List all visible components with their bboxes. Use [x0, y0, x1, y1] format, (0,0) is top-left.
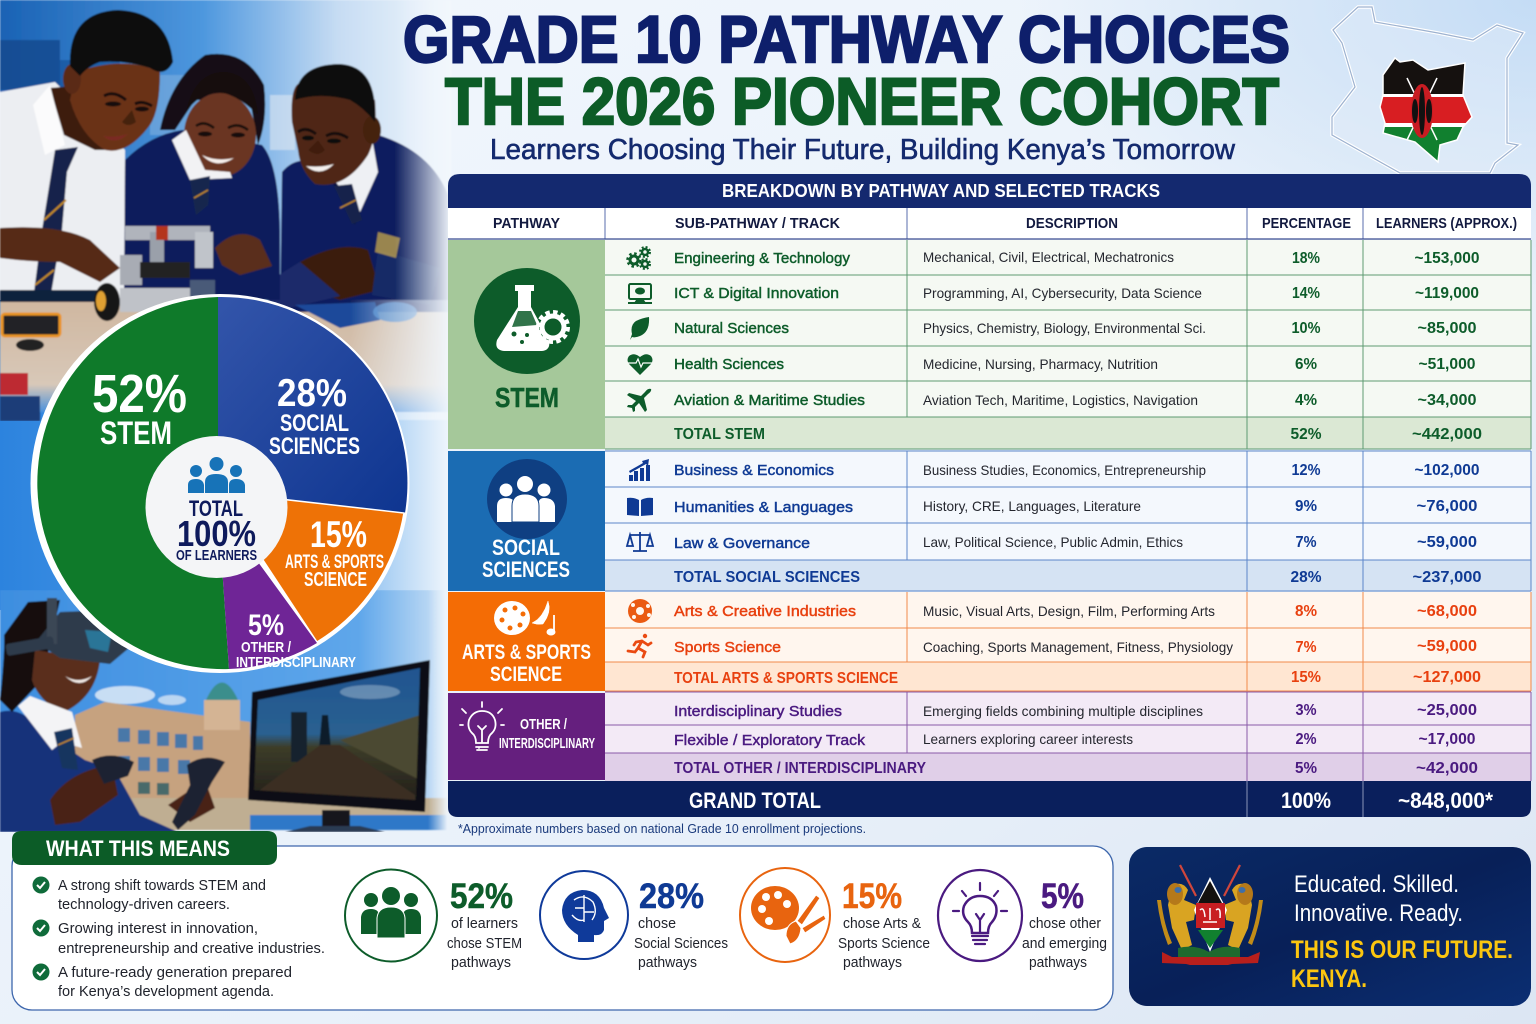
row: total Other / Interdisciplinary: TOTAL OTHER / INTERDISCIPLINARY	[674, 760, 927, 777]
heading line 2: THE 2026 PIONEER COHORT	[445, 64, 1279, 138]
bullet: future-ready generation	[32, 964, 292, 1000]
row: Health Sciences: ~51,000	[1418, 356, 1476, 373]
row: grand total: ~848,000*	[1398, 788, 1493, 813]
row: Humanities and Languages: ~76,000	[1416, 498, 1478, 515]
bullet: shift towards STEM	[32, 876, 266, 913]
row: Business and Economics: 12%	[1292, 462, 1321, 479]
icon: scales of justice	[627, 532, 653, 551]
row: Health Sciences: Medicine, Nursing, Pharmacy, Nutrition	[923, 356, 1158, 372]
pathway cell: Arts and Sports Science: ARTS & SPORTS	[462, 641, 591, 664]
row: Interdisciplinary Studies: 3%	[1296, 702, 1317, 719]
row: Interdisciplinary Studies: Interdisciplinary Studies	[674, 703, 842, 720]
stat: 28% Social Sciences	[540, 871, 728, 971]
stat: 28% Social Sciences: pathways	[638, 954, 697, 971]
row: Health Sciences: 6%	[1295, 356, 1317, 373]
row: total Arts and Sports Science: TOTAL ARTS & SPORTS SCIENCE	[674, 670, 898, 687]
student right	[255, 64, 450, 312]
row: Natural Sciences: Natural Sciences	[674, 320, 789, 337]
pathway cell: Other / Interdisciplinary: INTERDISCIPLINARY	[499, 735, 595, 752]
row: Sports Science: Sports Science	[674, 639, 781, 656]
row: Interdisciplinary Studies: ~25,000	[1417, 702, 1477, 719]
row: Business and Economics: Business & Economics	[674, 462, 834, 479]
row: Aviation and Maritime Studies: 4%	[1295, 392, 1317, 409]
title block	[403, 2, 1290, 166]
student centre	[116, 54, 280, 300]
row: ICT and Digital Innovation: ~119,000	[1415, 285, 1479, 302]
stat: 52% STEM: pathways	[451, 954, 511, 971]
row: Law and Governance: Law & Governance	[674, 535, 810, 552]
stat: 52% STEM: chose STEM	[447, 935, 522, 952]
stat: 52% STEM	[345, 870, 522, 971]
row: Flexible / Exploratory Track: Flexible / Exploratory Track	[674, 732, 866, 749]
bullet: shift towards STEM: A strong shift towards STEM and	[58, 877, 266, 894]
icon: group of people	[188, 457, 245, 493]
row: total Arts and Sports Science: ~127,000	[1413, 669, 1481, 686]
row: Business and Economics	[629, 459, 1480, 481]
row: total Arts and Sports Science: 15%	[1291, 669, 1321, 686]
stat: 52% STEM: of learners	[451, 915, 518, 932]
row: Humanities and Languages: 9%	[1295, 498, 1317, 515]
row: Health Sciences	[628, 354, 1476, 375]
robot kit	[94, 226, 215, 321]
row: Business and Economics: ~102,000	[1414, 462, 1480, 479]
desk items	[0, 302, 417, 421]
student left	[0, 10, 173, 302]
centre badge: total 100% of learners	[146, 436, 288, 578]
column headers: SUB-PATHWAY / TRACK	[675, 215, 840, 232]
row: Flexible / Exploratory Track: ~17,000	[1418, 731, 1476, 748]
photo: VR learner, campus and monitor	[0, 590, 448, 832]
lion right	[1224, 884, 1252, 950]
row: Aviation and Maritime Studies: Aviation & Maritime Studies	[674, 392, 865, 409]
pathway cell: STEM	[448, 240, 605, 449]
row: Sports Science: Coaching, Sports Management, Fitness, Physiology	[923, 639, 1233, 655]
row: Law and Governance: Law, Political Science, Public Admin, Ethics	[923, 534, 1183, 550]
heading tab: WHAT THIS MEANS	[46, 836, 230, 861]
pathway cell: Other / Interdisciplinary: OTHER /	[520, 717, 567, 733]
section: STEM	[448, 240, 1531, 449]
stat: 15% Arts and Sports Science	[740, 868, 930, 971]
pathway cell: Arts and Sports Science: SCIENCE	[490, 663, 562, 686]
row: Aviation and Maritime Studies	[627, 389, 1477, 412]
row: Sports Science: ~59,000	[1417, 638, 1477, 655]
row: Engineering and Technology: Engineering & Technology	[674, 250, 850, 267]
row: Arts and Creative Industries	[628, 599, 1477, 623]
campus building	[75, 682, 448, 830]
row: Sports Science	[628, 634, 1477, 657]
row: Law and Governance	[627, 532, 1477, 552]
section: Arts and Sports Science	[448, 592, 1531, 691]
row: total Social Sciences: 28%	[1290, 569, 1322, 586]
bullet: innovation and entrepreneurship: entrepreneurship and creative industries.	[58, 940, 325, 957]
icon: rising bar chart	[629, 459, 650, 481]
photo: three students building a robot	[0, 0, 452, 421]
icon: head with brain	[540, 871, 628, 959]
section: Other / Interdisciplinary	[448, 692, 1531, 781]
label: 52% STEM: STEM	[100, 415, 172, 451]
centre badge: total 100% of learners: 100%	[177, 513, 256, 554]
icon: open book	[627, 498, 653, 516]
table: breakdown by pathway and selected tracks	[448, 174, 1531, 817]
icon: music notes	[532, 601, 555, 635]
row: Humanities and Languages: Humanities & Languages	[674, 499, 853, 516]
row: Arts and Creative Industries: ~68,000	[1417, 603, 1477, 620]
row: Law and Governance: ~59,000	[1417, 534, 1477, 551]
label: 5% Other: 5%	[248, 609, 284, 642]
row: Humanities and Languages	[627, 498, 1478, 516]
label: 28% Social Sciences	[269, 372, 360, 460]
row: Engineering and Technology: Mechanical, Civil, Electrical, Mechatronics	[923, 249, 1174, 265]
row: Flexible / Exploratory Track: Learners exploring career interests	[923, 731, 1133, 747]
stat: 5% other and emerging: chose other	[1029, 915, 1101, 932]
icon: airplane	[627, 389, 651, 412]
row: Arts and Creative Industries: 8%	[1295, 603, 1317, 620]
column headers	[448, 208, 1531, 239]
row: Engineering and Technology	[628, 247, 1480, 269]
column headers: DESCRIPTION	[1026, 215, 1118, 232]
heading line 1: GRADE 10 PATHWAY CHOICES	[403, 2, 1290, 76]
row: ICT and Digital Innovation: 14%	[1292, 285, 1320, 302]
stat: 15% Arts and Sports Science: chose Arts &	[843, 915, 921, 932]
centre badge: total 100% of learners: TOTAL	[189, 496, 243, 521]
stat: 28% Social Sciences: 28%	[639, 877, 704, 916]
icon: Kenya coat of arms	[1157, 865, 1263, 965]
stat: 28% Social Sciences: chose	[638, 915, 676, 932]
pathway cell: Social Sciences: SOCIAL	[492, 535, 560, 560]
lion left	[1168, 884, 1196, 950]
row: Aviation and Maritime Studies: ~34,000	[1418, 392, 1477, 409]
row: total Other / Interdisciplinary: ~42,000	[1416, 760, 1478, 777]
subtitle: Learners Choosing Their Future, Building Kenya’s Tomorrow	[490, 134, 1236, 166]
bullet: future-ready generation: A future-ready generation prepared	[58, 964, 292, 981]
panel: closing message	[1129, 847, 1531, 1006]
icon: light bulb in circle	[938, 870, 1022, 961]
pathway cell: Other / Interdisciplinary	[448, 693, 605, 780]
stat: 5% other and emerging: and emerging	[1022, 935, 1107, 952]
row: grand total	[448, 781, 1531, 817]
label: 52% STEM: 52%	[92, 364, 187, 424]
stat: 5% other and emerging: pathways	[1029, 954, 1087, 971]
row: grand total: 100%	[1281, 788, 1331, 813]
table title bar	[448, 174, 1531, 208]
row: Natural Sciences: ~85,000	[1418, 320, 1477, 337]
row: total STEM: TOTAL STEM	[674, 426, 765, 443]
row: Interdisciplinary Studies: Emerging fields combining multiple disciplines	[923, 703, 1203, 719]
row: total Social Sciences: ~237,000	[1412, 569, 1482, 586]
icon: people in circle	[345, 870, 437, 962]
row: Arts and Creative Industries: Arts & Creative Industries	[674, 603, 856, 620]
label: 28% Social Sciences: 28%	[277, 372, 347, 415]
bullet: innovation and entrepreneurship: Growing interest in innovation,	[58, 920, 258, 937]
row: Natural Sciences	[630, 317, 1477, 340]
row: Law and Governance: 7%	[1296, 534, 1317, 551]
row: ICT and Digital Innovation: ICT & Digital Innovation	[674, 285, 839, 302]
bullet: shift towards STEM: technology-driven careers.	[58, 896, 230, 913]
row: total Other / Interdisciplinary	[674, 760, 1478, 777]
label: 5% Other: INTERDISCIPLINARY	[236, 654, 356, 671]
stat: 15% Arts and Sports Science: 15%	[842, 877, 902, 916]
stat: 5% other and emerging: 5%	[1041, 877, 1084, 916]
icon: palette	[494, 601, 530, 635]
row: Sports Science: 7%	[1296, 639, 1317, 656]
icon: heart with pulse	[628, 354, 652, 375]
label: 52% STEM	[92, 364, 187, 451]
row: total Social Sciences: TOTAL SOCIAL SCIENCES	[674, 569, 860, 586]
label: 15% Arts and Sports Science: ARTS & SPORTS	[285, 552, 384, 573]
table title bar: BREAKDOWN BY PATHWAY AND SELECTED TRACKS	[722, 181, 1160, 201]
row: Health Sciences: Health Sciences	[674, 356, 784, 373]
icon: three people	[497, 476, 555, 522]
column headers: PERCENTAGE	[1262, 215, 1351, 232]
pathway cell: STEM: STEM	[495, 382, 559, 413]
row: Aviation and Maritime Studies: Aviation Tech, Maritime, Logistics, Navigation	[923, 392, 1198, 408]
row: Natural Sciences: 10%	[1292, 320, 1321, 337]
row: grand total: GRAND TOTAL	[689, 788, 821, 813]
label: 28% Social Sciences: SCIENCES	[269, 433, 360, 460]
segment: Other 5%	[218, 507, 317, 669]
icon: computer	[628, 284, 652, 304]
row: Arts and Creative Industries: Music, Visual Arts, Design, Film, Performing Arts	[923, 603, 1215, 619]
map of Kenya with flag	[1332, 7, 1523, 173]
label: 15% Arts and Sports Science	[285, 514, 384, 591]
label: 15% Arts and Sports Science: SCIENCE	[304, 569, 367, 591]
stat: 5% other and emerging	[938, 870, 1107, 971]
icon: paint splash	[628, 599, 652, 623]
row: total STEM	[674, 426, 1482, 443]
icon: flask and gear	[496, 285, 568, 351]
learner	[0, 598, 225, 832]
table	[0, 302, 450, 412]
row: Natural Sciences: Physics, Chemistry, Biology, Environmental Sci.	[923, 320, 1206, 336]
row: Business and Economics: Business Studies, Economics, Entrepreneurship	[923, 462, 1206, 478]
row: Flexible / Exploratory Track: 2%	[1296, 731, 1317, 748]
pathway cell: Social Sciences	[448, 451, 605, 591]
row: total STEM: 52%	[1290, 426, 1322, 443]
column headers: PATHWAY	[493, 215, 560, 232]
column headers: LEARNERS (APPROX.)	[1376, 215, 1517, 232]
stat: 52% STEM: 52%	[450, 877, 513, 916]
row: total Social Sciences	[674, 569, 1482, 586]
pathway cell: Social Sciences: SCIENCES	[482, 557, 570, 582]
row: Engineering and Technology: ~153,000	[1414, 250, 1480, 267]
stat: 15% Arts and Sports Science: Sports Science	[838, 935, 930, 952]
stat: 15% Arts and Sports Science: pathways	[843, 954, 902, 971]
row: Interdisciplinary Studies	[674, 702, 1477, 720]
label: 15% Arts and Sports Science: 15%	[310, 514, 367, 555]
footnote: *Approximate numbers based on national Grade 10 enrollment projections.	[458, 822, 866, 836]
icon: runner	[628, 634, 651, 657]
row: ICT and Digital Innovation: Programming, AI, Cybersecurity, Data Science	[923, 285, 1202, 301]
panel: closing message: Educated. Skilled.	[1294, 871, 1459, 898]
row: Flexible / Exploratory Track	[674, 731, 1476, 749]
pie chart: pathway shares	[30, 294, 410, 673]
icon: gears	[628, 247, 650, 269]
segment: STEM 52%	[37, 297, 229, 669]
stat: 28% Social Sciences: Social Sciences	[634, 935, 728, 952]
row: total Arts and Sports Science	[674, 669, 1481, 687]
shield	[1194, 877, 1227, 952]
row: Humanities and Languages: History, CRE, Languages, Literature	[923, 498, 1141, 514]
label: 28% Social Sciences: SOCIAL	[280, 410, 349, 437]
row: total STEM: ~442,000	[1412, 426, 1482, 443]
panel: closing message: KENYA.	[1291, 965, 1367, 993]
monitor	[248, 660, 430, 832]
icon: light bulb	[460, 702, 504, 750]
label: 5% Other	[236, 609, 356, 671]
segment: Arts and Sports Science 15%	[218, 492, 404, 642]
pathway cell: Arts and Sports Science	[448, 592, 605, 691]
centre badge: total 100% of learners: OF LEARNERS	[176, 548, 257, 564]
section: Social Sciences	[448, 451, 1531, 591]
row: ICT and Digital Innovation	[628, 284, 1479, 304]
bullet: future-ready generation: for Kenya’s development agenda.	[58, 983, 274, 1000]
panel: closing message: Innovative. Ready.	[1294, 900, 1463, 927]
label: 5% Other: OTHER /	[241, 639, 292, 656]
heading tab	[12, 831, 277, 865]
icon: palette and brushes	[740, 868, 830, 962]
row: total Other / Interdisciplinary: 5%	[1295, 760, 1317, 777]
panel: what this means	[12, 831, 1113, 1010]
mount and ribbon	[1178, 947, 1240, 960]
segment: Social Sciences 28%	[218, 297, 407, 513]
row: Engineering and Technology: 18%	[1292, 250, 1320, 267]
bullet: innovation and entrepreneurship	[32, 920, 325, 957]
icon: leaf	[630, 317, 649, 340]
